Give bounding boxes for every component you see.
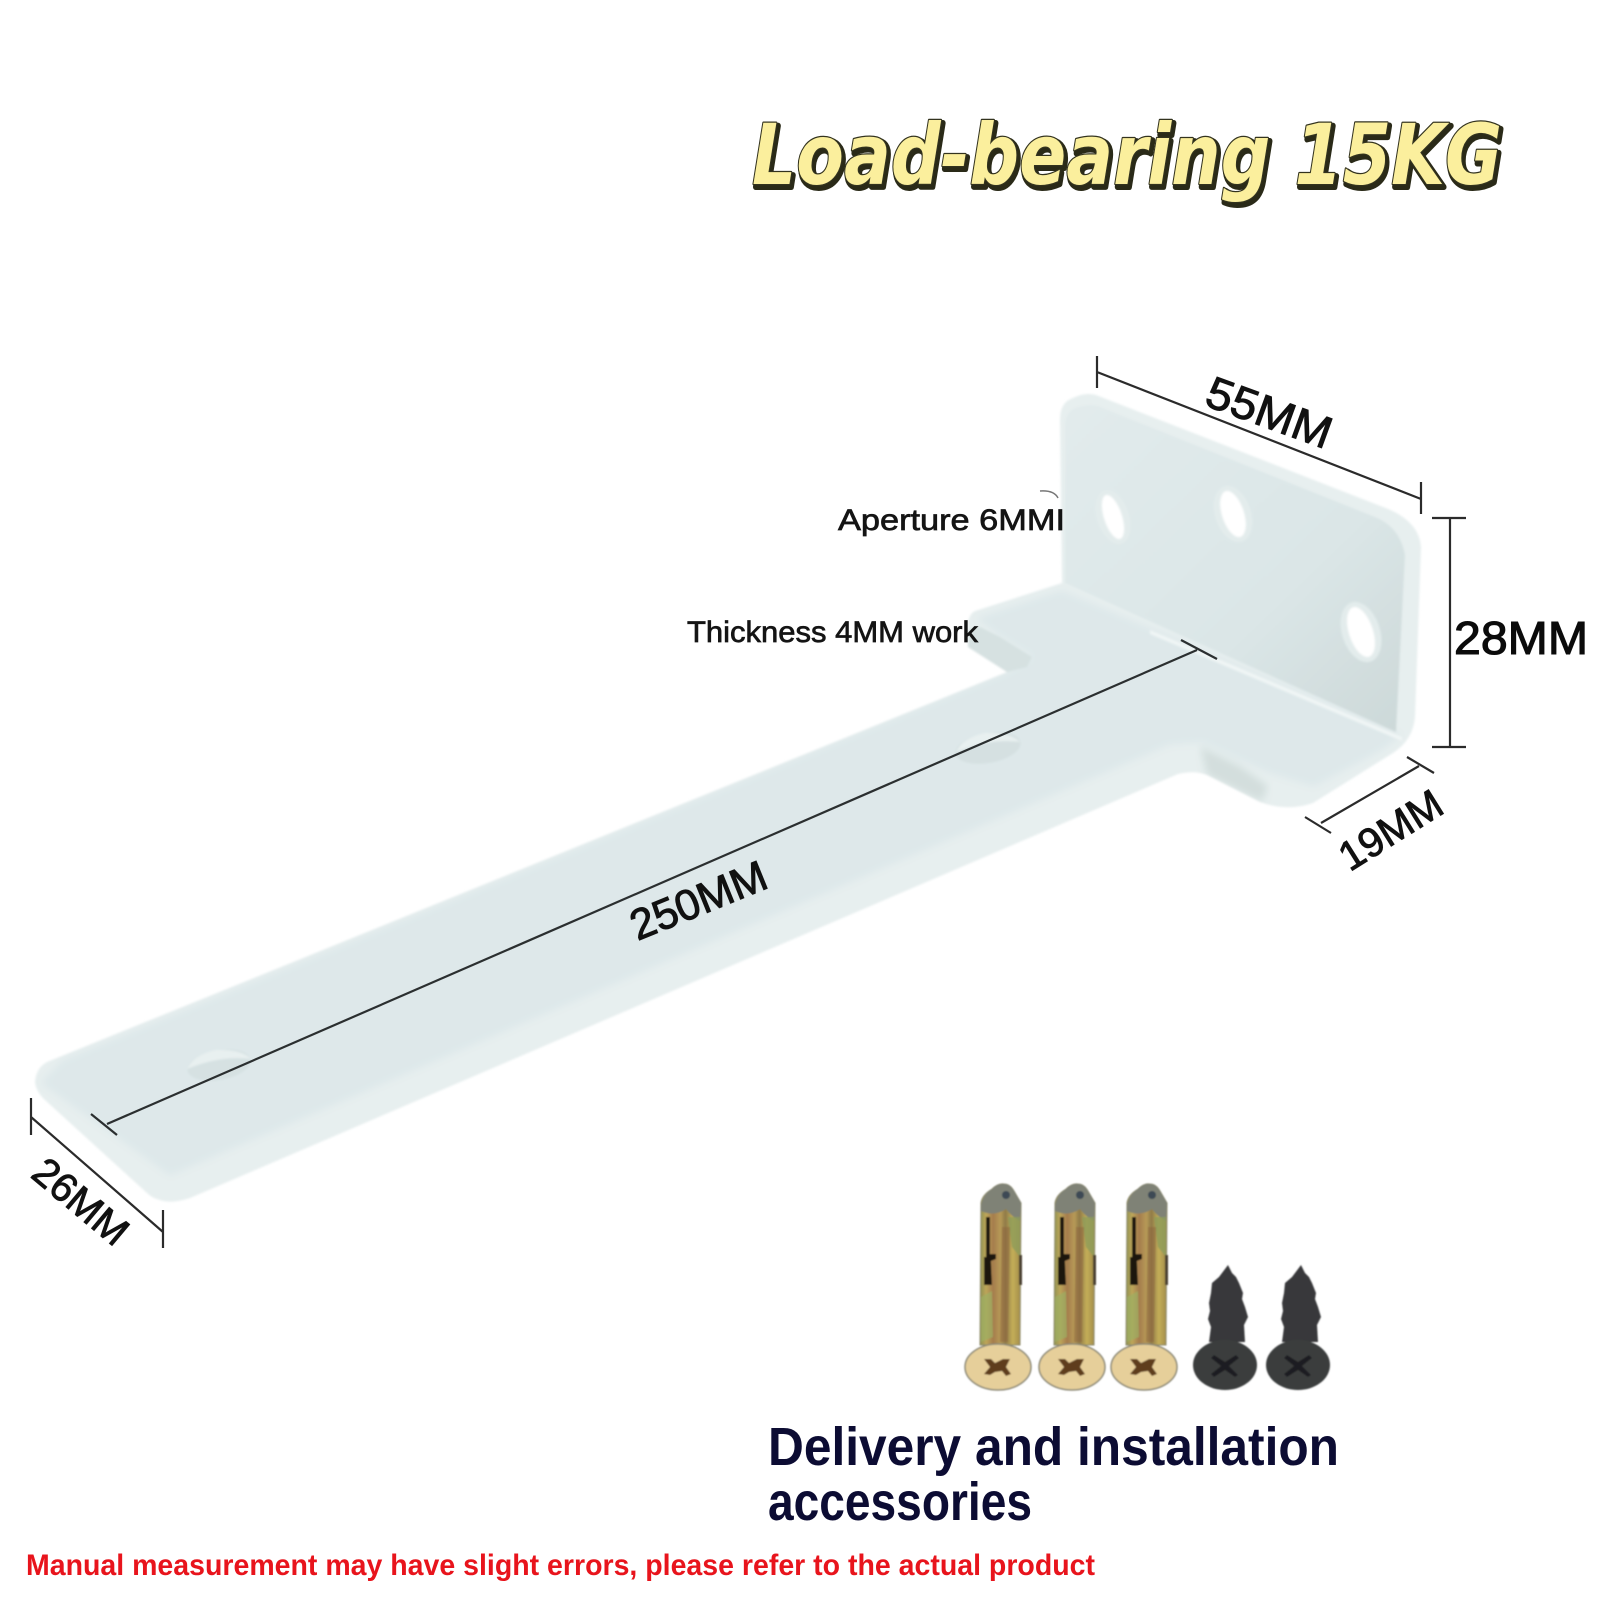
icon: black screw 2 — [1266, 1265, 1330, 1390]
mounting holes — [1089, 481, 1389, 667]
dimension: 55MM width — [1097, 356, 1421, 514]
heading: delivery accessories: accessories — [768, 1472, 1032, 1532]
dimension: 28MM height: 28MM — [1454, 612, 1588, 664]
disclaimer note: Manual measurement may have slight errors, please refer to the actual product — [26, 1549, 1095, 1582]
bracket silhouette — [35, 394, 1421, 1202]
fold highlight — [1150, 630, 1402, 741]
dimension: 250MM length: 250MM — [623, 852, 774, 950]
arm and flange top face — [40, 590, 1402, 1176]
dimension: 26MM end width: 26MM — [24, 1149, 137, 1255]
icon: black screw 1 — [1193, 1265, 1257, 1390]
label: aperture — [838, 491, 1065, 537]
icon: expansion anchor 1 — [965, 1184, 1031, 1390]
accessories: anchors and screws — [965, 1184, 1330, 1390]
label: aperture: Aperture 6MMI — [838, 504, 1065, 537]
upright plate face — [1065, 405, 1405, 732]
flange inner side wall — [1202, 749, 1267, 800]
dimension: 26MM end width — [24, 1098, 163, 1255]
dimension: 19MM flange — [1305, 757, 1451, 880]
label: thickness: Thickness 4MM work — [687, 616, 979, 649]
dimension: 250MM length — [91, 640, 1217, 1135]
dimension: 28MM height — [1432, 518, 1588, 747]
heading: delivery accessories: Delivery and installation — [768, 1417, 1339, 1477]
dimension: 55MM width: 55MM — [1199, 366, 1339, 459]
heading: delivery accessories — [768, 1417, 1339, 1532]
arm hole near the middle — [953, 727, 1023, 769]
product: white L-shaped shelf bracket — [35, 394, 1421, 1202]
arm hole near the end — [185, 1045, 253, 1085]
icon: expansion anchor 2 — [1039, 1184, 1105, 1390]
dimension: 19MM flange: 19MM — [1330, 780, 1451, 880]
icon: expansion anchor 3 — [1111, 1184, 1177, 1390]
tab side wall — [968, 627, 1032, 672]
